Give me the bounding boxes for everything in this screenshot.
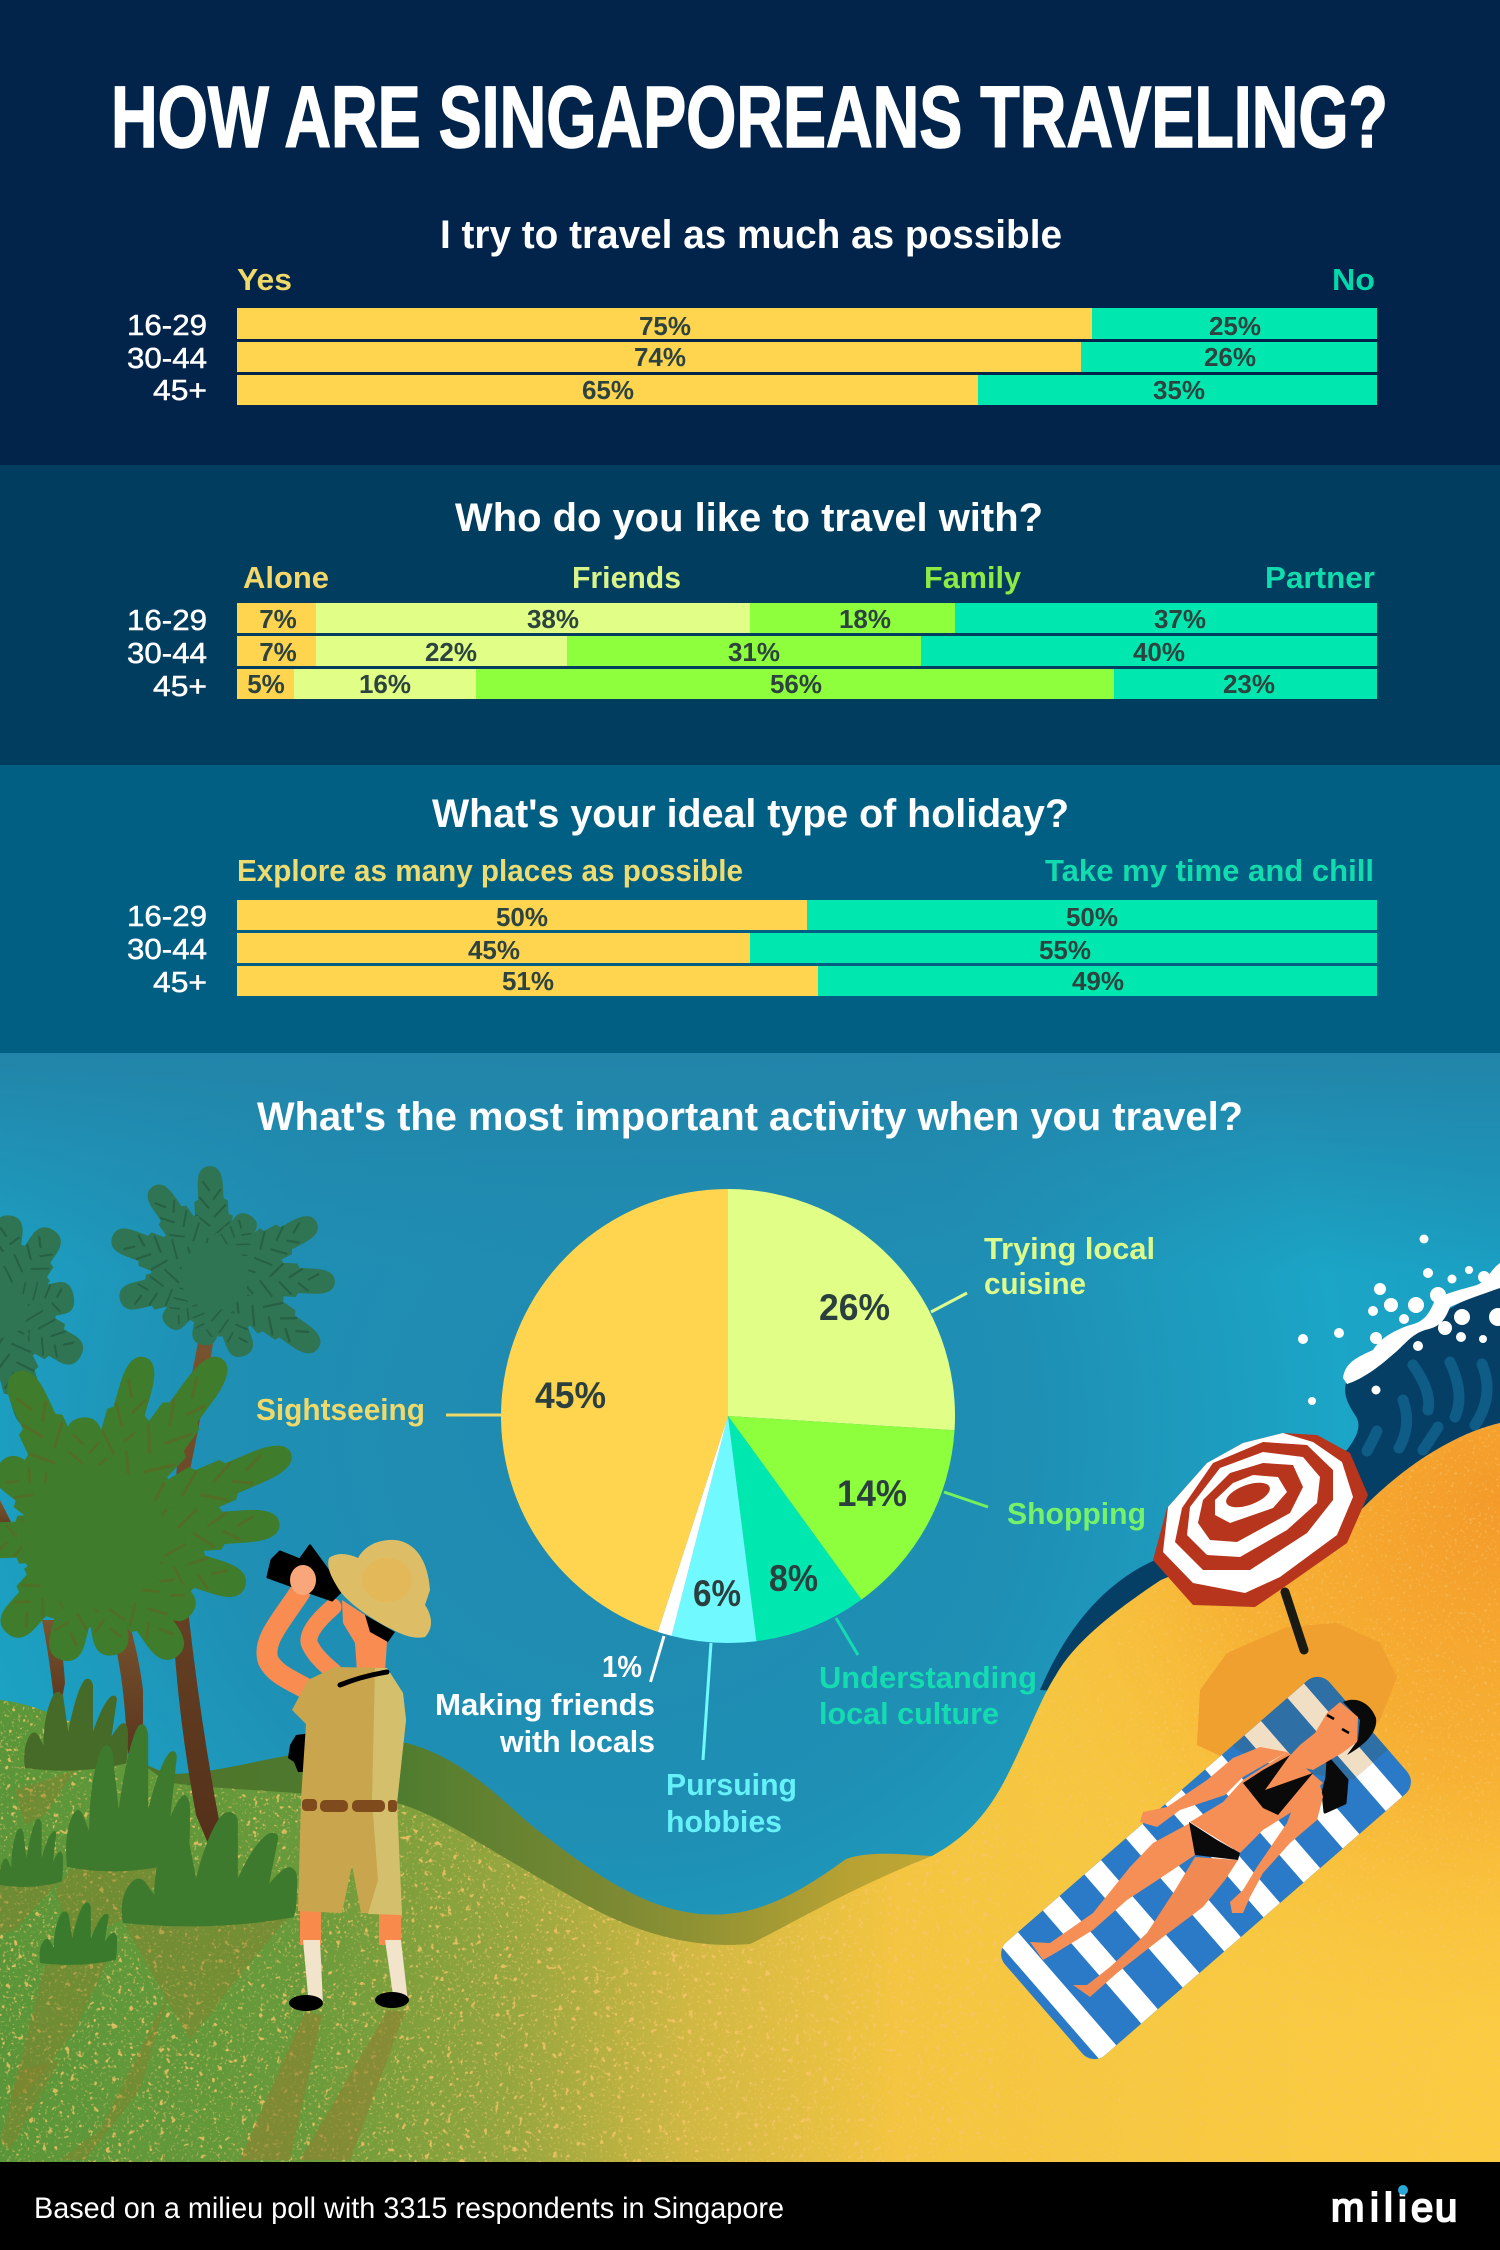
callout: trying local cuisine: Trying local: [984, 1231, 1155, 1266]
bar row: 45+: [153, 669, 1377, 703]
bar row: 16-29: 18%: [839, 604, 891, 634]
bar row: 16-29: 16-29: [127, 901, 207, 933]
footer: [0, 2162, 1500, 2250]
collar strap: [340, 1672, 387, 1685]
bar row: 45+: [153, 375, 1377, 407]
illustration: wave: [1040, 1234, 1500, 1700]
bar row: 16-29: [127, 900, 1377, 933]
right leg: [1073, 1857, 1238, 1997]
hand: [290, 1565, 316, 1595]
bar row: 16-29: [127, 603, 1377, 637]
leg shadows: [240, 2010, 405, 2160]
callout: making friends with locals: with locals: [499, 1724, 655, 1759]
bar row: 45+: 56%: [770, 669, 822, 699]
illustration: back palm tree: [104, 1165, 336, 1848]
bar row: 30-44: 74%: [634, 342, 686, 372]
legend: yes: Yes: [237, 262, 292, 297]
slice: pursuing hobbies 6%: [672, 1416, 756, 1643]
bar row: 30-44: [127, 342, 1377, 375]
bar row: 16-29: 16-29: [127, 310, 207, 342]
bar row: 30-44: 22%: [425, 637, 477, 667]
arm right: [1230, 1785, 1323, 1913]
bar row: 30-44: 45%: [468, 935, 520, 965]
bar row: 16-29: 37%: [1154, 604, 1206, 634]
bikini bottom: [1189, 1822, 1240, 1860]
illustration: left palm tree: [0, 1213, 94, 1432]
legend: companions: Friends: [572, 560, 681, 595]
legend: companions: Alone: [243, 560, 329, 595]
bar row: 45+: [153, 966, 1377, 999]
callout: shopping: [944, 1492, 1146, 1531]
hair: [1343, 1700, 1376, 1755]
logo: milieu: milieu: [1331, 2186, 1457, 2230]
bar row: 30-44: 26%: [1204, 342, 1256, 372]
callout: pursuing hobbies: Pursuing: [666, 1767, 797, 1802]
towel area in umbrella shade: [1232, 1676, 1388, 1779]
legend: chill: Take my time and chill: [1045, 853, 1374, 888]
illustration: shoreline band: [0, 1700, 1000, 2000]
slice: understanding local culture 8%: [728, 1416, 861, 1641]
callout: sightseeing: Sightseeing: [256, 1392, 425, 1427]
legend: companions: Family: [924, 560, 1022, 595]
bar row: 16-29: 16-29: [127, 605, 207, 637]
legend: companions: [243, 560, 1375, 595]
bar row: 45+: 45+: [153, 375, 207, 407]
slice: making friends 1%: [658, 1416, 728, 1636]
bar row: 16-29: 25%: [1209, 311, 1261, 341]
shirt and shorts: [292, 1667, 406, 1915]
heading: ideal holiday: What's your ideal type of holiday?: [432, 792, 1069, 836]
illustration: sunbathing woman: [1030, 1700, 1376, 1997]
bar row: 30-44: 7%: [259, 637, 297, 667]
callout: pursuing hobbies: hobbies: [666, 1804, 782, 1839]
illustration: beach umbrella: [1153, 1433, 1368, 1650]
source note: Based on a milieu poll with 3315 respondents in Singapore: [34, 2192, 784, 2225]
torso: [1190, 1752, 1323, 1853]
bar row: 45+: 45+: [153, 671, 207, 703]
arms: [267, 1592, 334, 1692]
bar row: 30-44: 40%: [1133, 637, 1185, 667]
callout: making friends with locals: [435, 1636, 664, 1759]
bar row: 16-29: 7%: [259, 604, 297, 634]
panel: travel companions: [0, 465, 1500, 765]
legend: explore: Explore as many places as possible: [237, 853, 743, 888]
belt: [302, 1799, 397, 1812]
bar row: 16-29: 38%: [527, 604, 579, 634]
arm left: [1140, 1747, 1287, 1827]
panel: beach scene background: [0, 1053, 1500, 2162]
pie chart: activities: [501, 1189, 955, 1643]
panel: ideal holiday: [0, 765, 1500, 1053]
callout: making friends with locals: Making friends: [435, 1687, 655, 1722]
callout: making friends with locals: 1%: [602, 1649, 642, 1684]
callout: trying local cuisine: [931, 1231, 1155, 1312]
pith helmet: [328, 1540, 431, 1638]
heading: who do you travel with: Who do you like to travel with?: [455, 496, 1043, 540]
illustration: bushes: [0, 1679, 297, 1965]
bar row: 45+: 5%: [247, 669, 285, 699]
bar row: 45+: 16%: [359, 669, 411, 699]
ponytail: [1323, 1758, 1347, 1812]
left leg: [1030, 1823, 1195, 1960]
bar row: 16-29: 75%: [639, 311, 691, 341]
bar row: 30-44: [127, 933, 1377, 966]
wave foam: [1298, 1234, 1500, 1405]
binoculars: [268, 1546, 342, 1600]
bar row: 30-44: 30-44: [127, 934, 207, 966]
callout: understanding local culture: [819, 1618, 1037, 1731]
bar row: 16-29: 50%: [496, 902, 548, 932]
bar row: 30-44: [127, 636, 1377, 670]
pie values: [535, 1287, 907, 1614]
heading: travel as much as possible: I try to travel as much as possible: [440, 213, 1062, 257]
bar row: 30-44: 31%: [728, 637, 780, 667]
bar row: 30-44: 55%: [1039, 935, 1091, 965]
callout: shopping: Shopping: [1007, 1496, 1146, 1531]
bar row: 45+: 65%: [582, 375, 634, 405]
illustration: front palm tree: [0, 1341, 302, 1675]
pie values: 14%: [837, 1473, 907, 1514]
illustration: striped beach towel: [995, 1667, 1421, 2066]
pie values: 45%: [535, 1375, 606, 1416]
slice: trying local cuisine 26%: [728, 1189, 955, 1430]
callout: trying local cuisine: cuisine: [984, 1266, 1086, 1301]
waist binocular case: [288, 1733, 311, 1772]
heading: most important activity: What's the most important activity when you travel?: [257, 1095, 1243, 1139]
neck: [342, 1600, 387, 1672]
legend: no: No: [1332, 262, 1375, 297]
illustration: sand and grass ground: [0, 1420, 1500, 2162]
bar row: 45+: 45+: [153, 967, 207, 999]
bar row: 30-44: 30-44: [127, 343, 207, 375]
bar row: 16-29: 50%: [1066, 902, 1118, 932]
panel: title and travel frequency: [0, 0, 1500, 465]
illustration: bush and palm shadows on ground: [0, 1770, 290, 2160]
bar row: 16-29: [127, 308, 1377, 342]
legs and socks: [289, 1905, 409, 2011]
legend: companions: Partner: [1265, 560, 1375, 595]
illustration: umbrella shadow: [1197, 1623, 1397, 1770]
bar row: 45+: 49%: [1072, 966, 1124, 996]
slice: sightseeing 45%: [501, 1189, 728, 1632]
eyes: [1327, 1715, 1349, 1733]
hair: [365, 1615, 395, 1642]
bikini top: [1243, 1755, 1313, 1815]
slice: shopping 14%: [728, 1416, 955, 1600]
pie values: 8%: [769, 1558, 818, 1599]
callout: pursuing hobbies: [666, 1643, 797, 1839]
callout: understanding local culture: local culture: [819, 1696, 999, 1731]
bar row: 45+: 35%: [1153, 375, 1205, 405]
callout: understanding local culture: Understanding: [819, 1660, 1037, 1695]
pie values: 26%: [819, 1287, 890, 1328]
illustration: explorer with binoculars: [240, 1540, 431, 2160]
illustration: front palm trunks: [0, 1500, 143, 1783]
bar row: 30-44: 30-44: [127, 638, 207, 670]
bar row: 45+: 23%: [1223, 669, 1275, 699]
pie values: 6%: [693, 1573, 741, 1614]
head and neck: [1283, 1702, 1358, 1770]
bar row: 45+: 51%: [502, 966, 554, 996]
